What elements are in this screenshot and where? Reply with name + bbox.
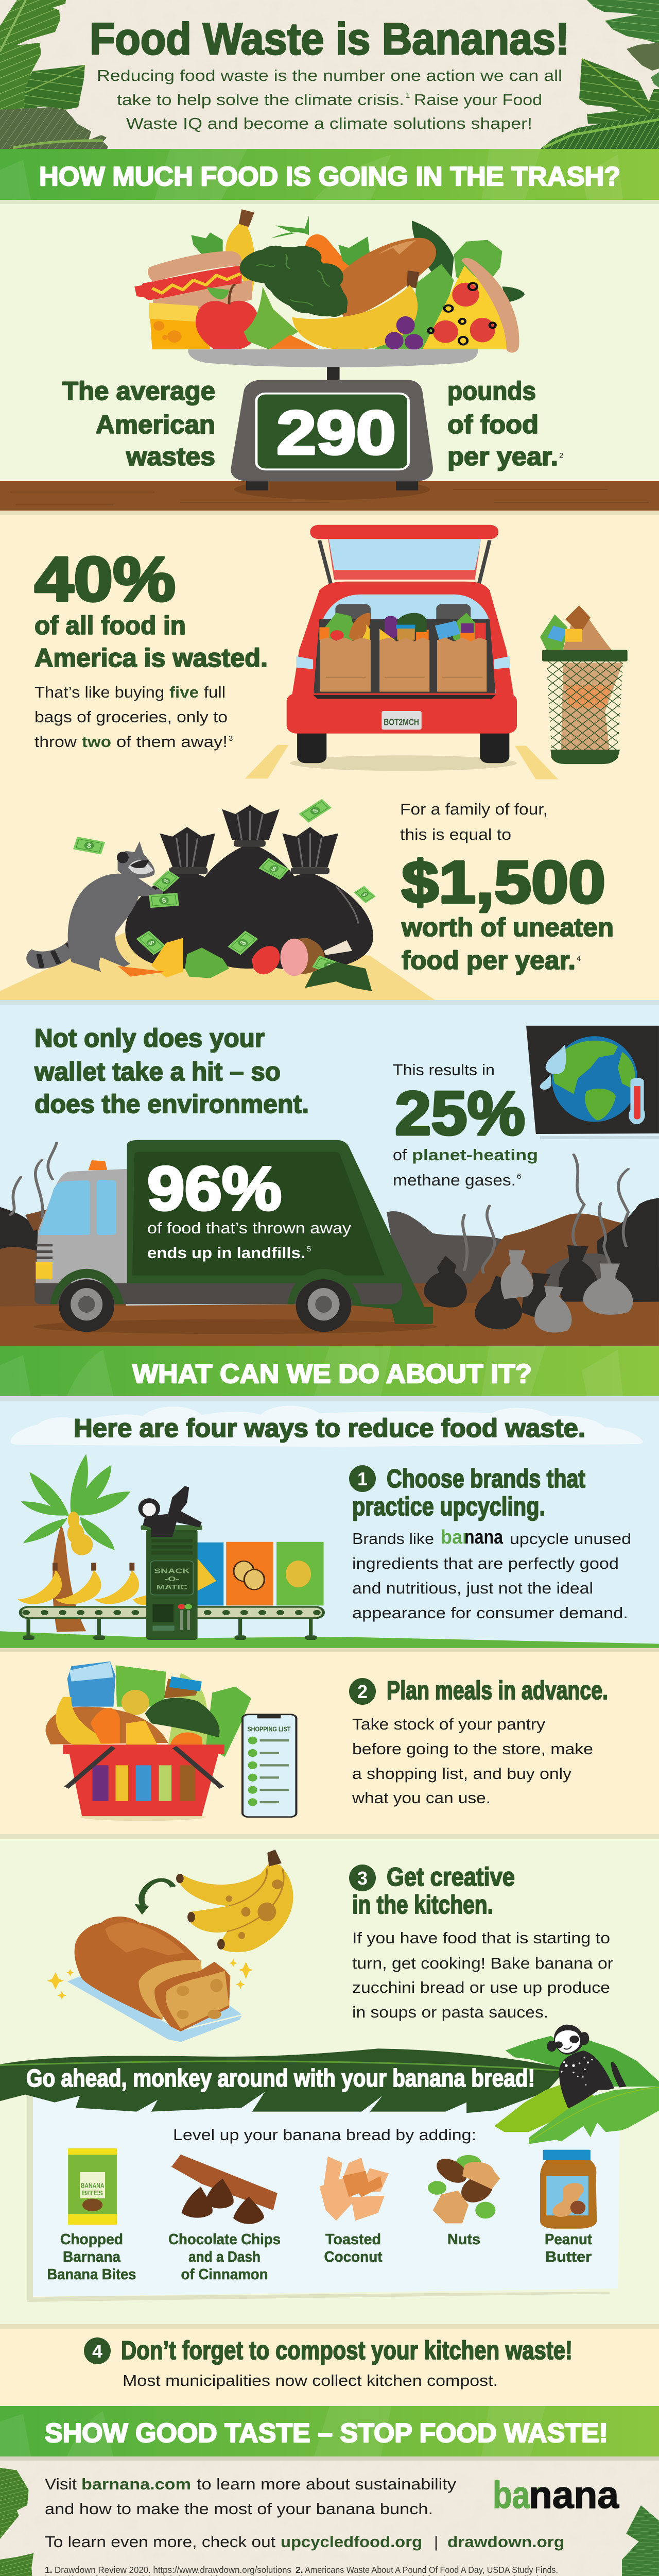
- intro text: 1: [406, 91, 410, 100]
- logo: barnana: nana: [529, 2473, 619, 2516]
- text: visit barnana.com: [45, 2475, 457, 2518]
- references: [45, 2565, 617, 2576]
- stat: 96 percent: ends up in landfills.: [147, 1244, 305, 1262]
- text: planet-heating methane: planet-heating: [412, 1146, 538, 1164]
- product labels: of Cinnamon: [181, 2266, 268, 2283]
- product labels: Banana Bites: [47, 2266, 136, 2283]
- banner: show good taste: SHOW GOOD TASTE – STOP FOOD WASTE!: [45, 2418, 608, 2448]
- step 2: 2: [357, 1681, 368, 1702]
- text: five bags of groceries: That’s like buying: [34, 683, 164, 701]
- cloud behind heading: [10, 1405, 643, 1447]
- step 4: Don’t forget to compost your kitchen waste!: [121, 2336, 573, 2365]
- product labels: and a Dash: [188, 2249, 261, 2265]
- step 2: a shopping list, and buy only: [352, 1765, 572, 1783]
- 40 percent stat: of all food in: [34, 611, 186, 640]
- step 1: 1: [357, 1468, 368, 1489]
- text: to learn even more: |: [434, 2533, 438, 2551]
- text: visit barnana.com: and how to make the most of your banana bunch.: [45, 2500, 433, 2518]
- banner leaf: Go ahead, monkey around with your banana bread!: [26, 2065, 535, 2092]
- product labels: Chocolate Chips: [168, 2231, 281, 2248]
- references: 1.: [45, 2565, 53, 2575]
- stat: 1500 dollars: food per year.: [402, 946, 576, 975]
- stat: 1500 dollars: 4: [577, 954, 581, 963]
- product labels: Barnana: [63, 2249, 121, 2265]
- references: 2.: [296, 2565, 303, 2575]
- references: Drawdown Review 2020. https://www.drawdown.org/solutions: [55, 2565, 291, 2575]
- step 3: turn, get cooking! Bake banana or: [352, 1954, 613, 1972]
- illustration: snack-o-matic machine: MATIC: [157, 1583, 187, 1591]
- icon: nuts: [428, 2155, 500, 2224]
- text: to learn even more: To learn even more, check out: [45, 2533, 275, 2551]
- header leaves left: [0, 0, 108, 149]
- illustration: snack-o-matic machine: SNACK: [154, 1567, 190, 1575]
- text: five bags of groceries: [34, 683, 233, 751]
- icon: banana bites bag: BITES: [82, 2189, 103, 2197]
- banner: how much food: [0, 149, 659, 200]
- stat: 1500 dollars: $1,500: [402, 849, 605, 916]
- text: five bags of groceries: bags of groceries, only to: [34, 708, 228, 726]
- illustration: landfill: [0, 1143, 659, 1346]
- wood table: [0, 479, 659, 511]
- icon: toasted coconut: [319, 2156, 389, 2221]
- illustration: scale: [231, 367, 433, 490]
- text: visit barnana.com: Visit: [45, 2475, 77, 2493]
- banner: how much food: HOW MUCH FOOD IS GOING IN THE TRASH?: [39, 162, 620, 192]
- illustration: car trunk with groceries: [245, 525, 558, 779]
- illustration: snack-o-matic machine: -O-: [165, 1575, 179, 1583]
- step 3: zucchini bread or use up produce: [352, 1978, 610, 1996]
- product labels: Coconut: [324, 2249, 383, 2265]
- icon: banana bites bag: [68, 2148, 117, 2225]
- step 1: ingredients that are perfectly good: [352, 1554, 619, 1572]
- product labels: Butter: [545, 2249, 592, 2265]
- text: five bags of groceries: throw: [34, 733, 77, 751]
- text: level up: Level up your banana bread by adding:: [173, 2126, 476, 2144]
- stat: 1500 dollars: [401, 849, 614, 975]
- step 2: what you can use.: [352, 1789, 491, 1807]
- text: pounds of food per year: of food: [447, 410, 539, 439]
- text: planet-heating methane: [393, 1146, 538, 1189]
- step 1: Choose brands that: [387, 1464, 585, 1493]
- step 3: [349, 1862, 613, 2021]
- 40 percent stat: America is wasted.: [34, 643, 268, 672]
- references: Americans Waste About A Pound Of Food A Day, USDA Study Finds.: [305, 2565, 558, 2575]
- text: for a family of four: For a family of four,: [400, 800, 548, 818]
- product labels: Nuts: [447, 2231, 480, 2248]
- stat: 96 percent: 5: [307, 1245, 311, 1253]
- illustration: raccoon with trash bags: [0, 799, 435, 1000]
- banner: what can we do: [0, 1346, 659, 1396]
- text: the average american wastes: The average: [62, 377, 215, 405]
- text: the average american wastes: wastes: [126, 442, 215, 471]
- heading: wallet and environment: wallet take a hit – so: [34, 1057, 281, 1086]
- intro text: Waste IQ and become a climate solutions shaper!: [126, 114, 532, 132]
- text: five bags of groceries: two: [82, 733, 111, 751]
- text: the average american wastes: American: [96, 410, 215, 439]
- text: five bags of groceries: five: [169, 683, 199, 701]
- heading: wallet and environment: [34, 1024, 309, 1118]
- heading: four ways: Here are four ways to reduce food waste.: [74, 1414, 585, 1443]
- text: pounds of food per year: 2: [559, 451, 563, 460]
- step 1: nana: [464, 1527, 504, 1548]
- step 3: 3: [357, 1868, 368, 1889]
- illustration: snack-o-matic machine: [0, 1454, 659, 1648]
- illustration: food on scale: [134, 209, 525, 367]
- title: Food Waste is Bananas!: [90, 14, 569, 64]
- step 1: appearance for consumer demand.: [352, 1604, 628, 1622]
- intro text: Raise your Food: [414, 91, 542, 109]
- text: five bags of groceries: 3: [229, 734, 233, 743]
- banner: what can we do: WHAT CAN WE DO ABOUT IT?: [132, 1359, 532, 1389]
- step 1: bar: [441, 1527, 470, 1548]
- 40 percent stat: 40%: [34, 544, 176, 614]
- stat: 25 percent: 25%: [395, 1079, 525, 1148]
- text: for a family of four: [400, 800, 548, 843]
- text: the average american wastes: [62, 377, 215, 471]
- icon: warming globe: [526, 1026, 659, 1139]
- heading: wallet and environment: Not only does your: [34, 1024, 265, 1053]
- banner leaf: [0, 2048, 567, 2113]
- logo: barnana: bar: [493, 2473, 542, 2516]
- stat: 96 percent: 96%: [147, 1154, 282, 1223]
- text: visit barnana.com: to learn more about sustainability: [197, 2475, 457, 2493]
- text: this results in: This results in: [393, 1061, 495, 1079]
- step 4: 4: [92, 2341, 102, 2362]
- step 1: and nutritious, just not the ideal: [352, 1579, 593, 1597]
- text: five bags of groceries: of them away!: [116, 733, 228, 751]
- product labels: Chopped: [60, 2231, 123, 2248]
- text: pounds of food per year: pounds: [447, 377, 536, 405]
- stat: 96 percent: of food that’s thrown away: [147, 1219, 352, 1237]
- step 2: Take stock of your pantry: [352, 1715, 546, 1733]
- illustration: monkey on leaves: [494, 2025, 659, 2144]
- heading: wallet and environment: does the environment.: [34, 1090, 309, 1118]
- step 3: Get creative: [387, 1862, 515, 1891]
- text: planet-heating methane: methane gases.: [393, 1171, 516, 1189]
- stat: 96 percent: [147, 1154, 352, 1262]
- step 1: Brands like: [352, 1530, 434, 1548]
- illustration: grocery basket: SHOPPING LIST: [247, 1725, 290, 1733]
- step 4: [84, 2336, 573, 2389]
- text: five bags of groceries: full: [204, 683, 226, 701]
- text: visit barnana.com: barnana.com: [81, 2475, 191, 2493]
- step 4: Most municipalities now collect kitchen compost.: [123, 2371, 498, 2389]
- intro text: [97, 66, 562, 132]
- banner: show good taste: [0, 2406, 659, 2456]
- icon: peanut butter jar: [540, 2150, 597, 2229]
- step 2: before going to the store, make: [352, 1740, 593, 1758]
- icon: chocolate chips and cinnamon: [171, 2155, 278, 2224]
- illustration: car trunk with groceries: BOT2MCH: [384, 718, 419, 727]
- number 290: 290: [276, 398, 396, 467]
- step 3: in the kitchen.: [352, 1890, 493, 1919]
- header leaves right: [541, 0, 659, 149]
- illustration: grocery basket: [46, 1662, 296, 1821]
- illustration: garbage truck: [34, 1140, 433, 1332]
- product labels: Peanut: [545, 2231, 592, 2248]
- product labels: [47, 2231, 592, 2283]
- step 1: practice upcycling.: [352, 1492, 545, 1521]
- footer leaves: [0, 2468, 659, 2576]
- step 1: [349, 1464, 631, 1622]
- text: for a family of four: this is equal to: [400, 825, 511, 843]
- text: planet-heating methane: 6: [517, 1172, 521, 1181]
- text: pounds of food per year: [447, 377, 563, 471]
- 40 percent stat: [34, 544, 268, 672]
- illustration: bananas and banana bread: [47, 1850, 293, 2042]
- intro text: Reducing food waste is the number one action we can all: [97, 66, 562, 84]
- stat: 1500 dollars: worth of uneaten: [401, 913, 614, 942]
- icon: trash can: [540, 605, 628, 764]
- product labels: Toasted: [325, 2231, 381, 2248]
- panel: banana bread add-ins: [27, 2093, 620, 2302]
- intro text: take to help solve the climate crisis.: [117, 91, 404, 109]
- text: planet-heating methane: of: [393, 1146, 407, 1164]
- step 3: in soups or pasta sauces.: [352, 2003, 548, 2021]
- text: to learn even more: upcycledfood.org: [281, 2533, 422, 2551]
- step 3: If you have food that is starting to: [352, 1929, 610, 1947]
- step 2: [349, 1676, 608, 1807]
- icon: banana bites bag: BANANA: [81, 2182, 105, 2190]
- step 1: upcycle unused: [510, 1530, 631, 1548]
- text: pounds of food per year: per year.: [447, 442, 558, 471]
- text: to learn even more: drawdown.org: [447, 2533, 564, 2551]
